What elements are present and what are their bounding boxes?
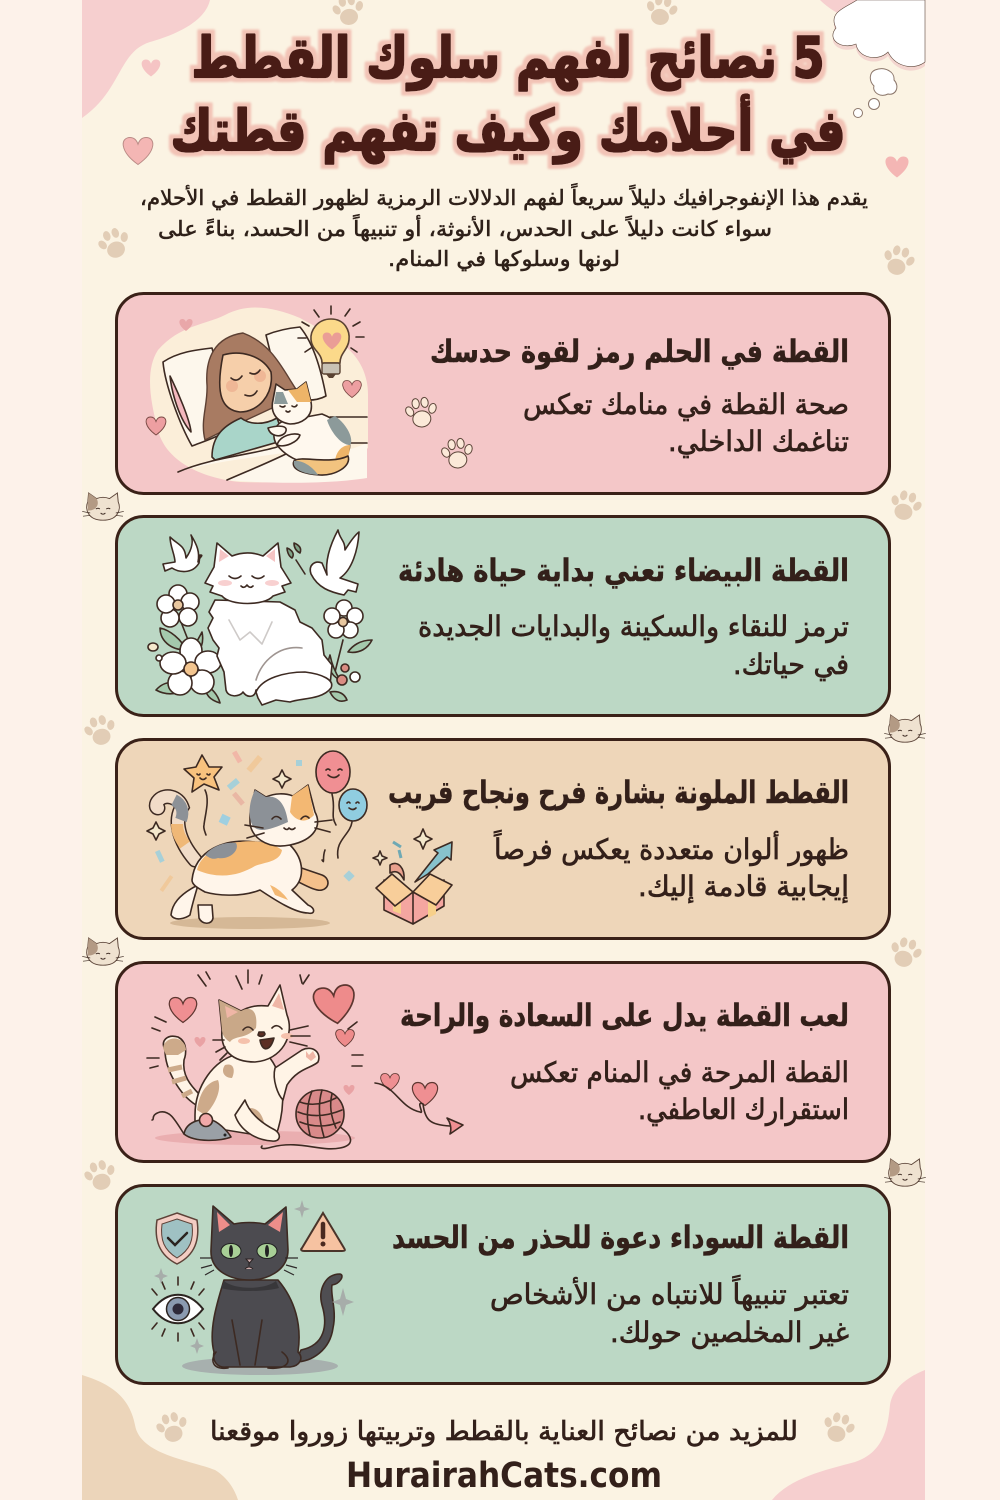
icon: balloons [316, 751, 367, 862]
body text: إيجابية قادمة إليك. [638, 870, 849, 903]
doves [163, 530, 359, 595]
icon: shield [156, 1213, 198, 1264]
icon: warning triangle [301, 1213, 345, 1251]
flowers [148, 585, 372, 703]
icon: dream cloud [833, 0, 925, 118]
footer call to action [210, 1417, 798, 1496]
illustration: white cat with doves and flowers [148, 530, 372, 705]
body text: في حياتك. [733, 648, 849, 681]
illustration: running calico, star and balloons [147, 750, 367, 929]
website url: HurairahCats.com [346, 1456, 662, 1496]
heading: القطة السوداء دعوة للحذر من الحسد [392, 1220, 849, 1256]
body text: تعتبر تنبيهاً للانتباه من الأشخاص [490, 1274, 849, 1311]
illustration: happy cat with yarn and mouse [147, 970, 363, 1149]
panel: black cat [116, 1186, 890, 1384]
confetti [155, 750, 355, 892]
footer call to action: للمزيد من نصائح العناية بالقطط وتربيتها زوروا موقعنا [210, 1417, 798, 1447]
body text: استقرارك العاطفي. [638, 1093, 849, 1126]
icon: heart arrow [375, 1074, 463, 1134]
title: 5 نصائح لفهم سلوك القطط [192, 26, 824, 91]
illustration: sleeping girl with cat and light bulb [146, 306, 368, 483]
cat [205, 543, 332, 705]
heading: القطة في الحلم رمز لقوة حدسك [430, 334, 849, 370]
body text: ظهور ألوان متعددة يعكس فرصاً [494, 829, 849, 866]
body text: القطة المرحة في المنام تعكس [510, 1056, 849, 1089]
tail [156, 797, 195, 860]
body text [510, 1056, 849, 1126]
icon: light bulb [298, 306, 364, 378]
panel: calico celebrating [116, 740, 890, 938]
icon: gift box with rising arrow [373, 829, 452, 924]
mouse [152, 1112, 231, 1140]
body text [494, 829, 849, 903]
panel: white cat [116, 516, 890, 716]
title: في أحلامك وكيف تفهم قطتك [170, 94, 846, 164]
body text: صحة القطة في منامك تعكس [523, 388, 849, 421]
panel: playful cat [116, 962, 890, 1162]
body text: غير المخلصين حولك. [610, 1316, 849, 1349]
intro text: لونها وسلوكها في المنام. [388, 247, 620, 271]
hearts [169, 984, 358, 1095]
sparkles [147, 770, 291, 840]
body text [418, 610, 849, 681]
heading: لعب القطة يدل على السعادة والراحة [400, 998, 849, 1034]
body text [490, 1274, 849, 1349]
intro text: سواء كانت دليلاً على الحدس، الأنوثة، أو تنبيهاً من الحسد، بناءً على [158, 213, 772, 241]
title [170, 26, 846, 164]
body text [523, 388, 849, 458]
background hearts [123, 60, 909, 178]
yarn ball [261, 1090, 351, 1149]
body text: تناغمك الداخلي. [668, 425, 849, 458]
body text: ترمز للنقاء والسكينة والبدايات الجديدة [418, 610, 849, 643]
icon: star balloon [184, 755, 222, 835]
heading: القطط الملونة بشارة فرح ونجاح قريب [388, 775, 849, 811]
intro text [140, 182, 868, 271]
peeking cat faces [82, 493, 926, 1186]
panel: intuition dream [116, 294, 890, 494]
sparkles [154, 1200, 354, 1354]
illustration: black cat with warning icons [152, 1200, 354, 1375]
intro text: يقدم هذا الإنفوجرافيك دليلاً سريعاً لفهم الدلالات الرمزية لظهور القطط في الأحلام، [140, 182, 868, 211]
icon: eye [152, 1277, 204, 1341]
heading: القطة البيضاء تعني بداية حياة هادئة [398, 553, 849, 589]
icon: outlined paw prints [403, 396, 476, 470]
